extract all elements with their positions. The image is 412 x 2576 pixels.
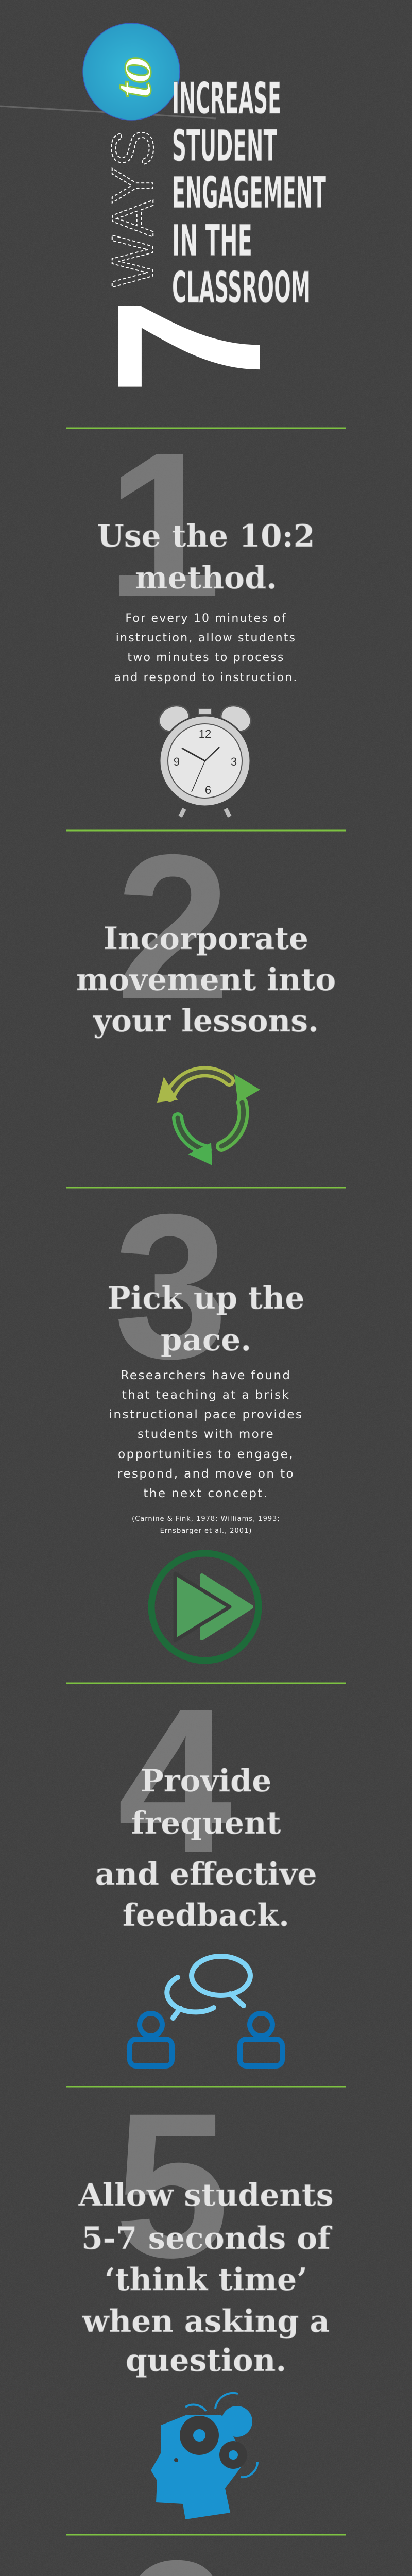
heading 5: 5-7 seconds of: [81, 2221, 333, 2257]
title text: INCREASE: [172, 73, 281, 124]
title text: IN THE: [172, 215, 252, 266]
body 1: instruction, allow students: [116, 632, 296, 645]
heading 5: ‘think time’: [105, 2262, 307, 2298]
number 1: 1: [107, 410, 221, 640]
badge: to circle: to: [103, 56, 162, 98]
title block: [74, 23, 326, 394]
number 5: 5: [115, 2070, 229, 2300]
heading 3: Pick up the: [108, 1280, 304, 1316]
heading 1: Use the 10:2: [97, 518, 315, 554]
text: big 7: 7: [74, 298, 304, 394]
citation: [132, 1515, 280, 1535]
heading 4: feedback.: [123, 1897, 289, 1934]
icon: feedback people: [130, 1956, 282, 2066]
heading 4: [95, 1763, 317, 1934]
badge: to circle: [83, 23, 180, 120]
body 3: respond, and move on to: [117, 1467, 295, 1481]
body 1: [114, 612, 298, 684]
body 3: instructional pace provides: [109, 1408, 303, 1421]
title text: STUDENT: [172, 121, 277, 171]
icon: alarm clock: 12: [199, 727, 211, 740]
heading 1: [97, 518, 315, 596]
icon: alarm clock: 6: [205, 784, 211, 796]
heading 2: movement into: [76, 962, 336, 998]
body 3: opportunities to engage,: [118, 1448, 294, 1461]
body 1: and respond to instruction.: [114, 671, 298, 684]
section 5: [78, 2070, 334, 2519]
heading 5: when asking a: [82, 2303, 330, 2340]
icon: alarm clock: [155, 701, 255, 817]
heading 5: question.: [126, 2343, 286, 2379]
body 1: two minutes to process: [127, 651, 285, 664]
number 4: 4: [117, 1666, 233, 1896]
heading 5: [78, 2177, 334, 2379]
heading 2: your lessons.: [93, 1003, 319, 1039]
heading 2: [76, 921, 336, 1039]
body 3: that teaching at a brisk: [122, 1388, 290, 1402]
heading 1: method.: [135, 560, 277, 596]
body 3: students with more: [138, 1428, 274, 1441]
heading 4: Provide: [141, 1763, 271, 1799]
heading 2: Incorporate: [104, 921, 308, 957]
icon: fast-forward: [151, 1553, 259, 1660]
section 3: [108, 1171, 304, 1660]
citation: (Carnine & Fink, 1978; Williams, 1993;: [132, 1515, 280, 1523]
citation: Ernsbarger et al., 2001): [160, 1527, 252, 1535]
section 2: [76, 811, 336, 1165]
number 2: 2: [116, 811, 230, 1042]
body 3: Researchers have found: [121, 1369, 291, 1382]
heading 3: pace.: [161, 1322, 251, 1358]
heading 4: and effective: [95, 1856, 317, 1892]
heading 3: [108, 1280, 304, 1358]
body 3: [109, 1369, 303, 1500]
icon: cycle arrows: [157, 1072, 260, 1165]
heading 5: Allow students: [78, 2177, 334, 2213]
icon: alarm clock: 3: [231, 755, 237, 768]
text: WAYS vertical: WAYS: [100, 130, 166, 287]
heading 4: frequent: [131, 1805, 281, 1841]
number 3: 3: [114, 1171, 228, 1401]
body 1: For every 10 minutes of: [125, 612, 287, 625]
section 1: [97, 410, 315, 817]
icon: head with gears: [151, 2393, 258, 2519]
section 4: [95, 1666, 317, 2066]
title text: [172, 73, 326, 313]
icon: alarm clock: 9: [174, 755, 180, 768]
body 3: the next concept.: [143, 1487, 269, 1500]
